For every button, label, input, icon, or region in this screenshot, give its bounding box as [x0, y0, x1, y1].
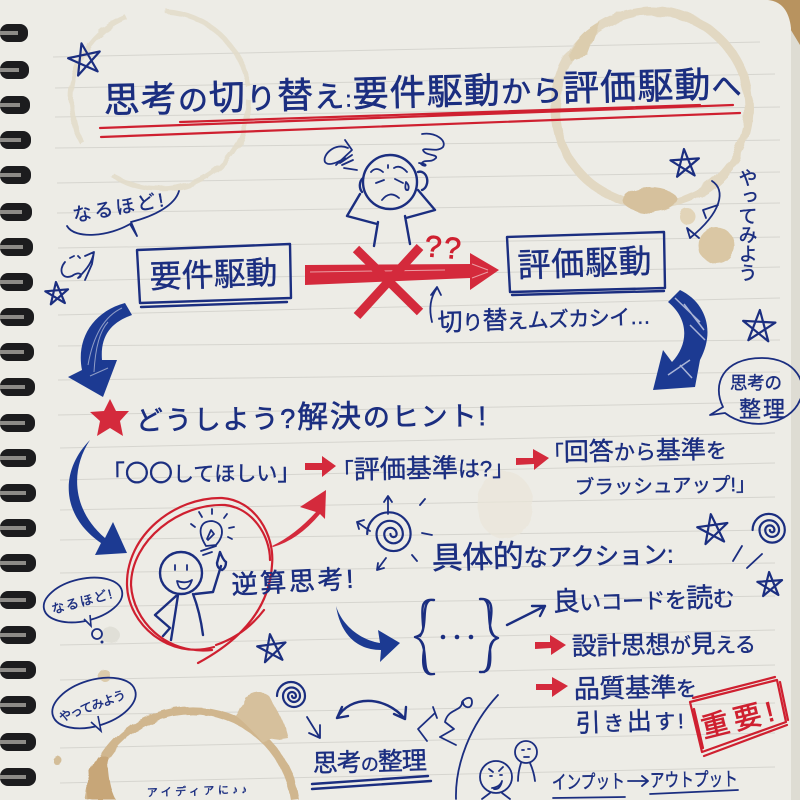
- text: 逆算思考: 逆算思考!: [231, 564, 354, 600]
- icon: two people: [480, 741, 537, 799]
- icon: star center: [256, 632, 288, 663]
- callout: なるほど lower: [39, 571, 127, 644]
- heading: 思考の整理: 思考の整理: [312, 747, 427, 778]
- spiral binding: [0, 24, 36, 786]
- arrow: red diagonal: [272, 490, 326, 547]
- text: 品質基準を引き出す: 引き出す!: [575, 706, 684, 738]
- arrow: small down: [307, 717, 320, 738]
- icon: star left: [45, 281, 69, 305]
- icon: star action right: [696, 512, 730, 545]
- arrow: small curve: [687, 181, 720, 238]
- callout: なるほど lower: なるほど!: [50, 586, 114, 617]
- callout: なるほど top: [67, 189, 179, 236]
- callout: 思考の整理: 整理: [739, 397, 785, 422]
- text: インプット→アウトプット: インプット: [552, 771, 625, 794]
- icon: star right: [742, 309, 776, 342]
- box: 要件駆動: 要件駆動: [149, 255, 278, 295]
- arrow: blue curved right: [653, 290, 707, 390]
- text: 設計思想が見える: 設計思想が見える: [572, 630, 756, 661]
- text: 回答から基準を: [543, 436, 756, 499]
- box: 評価駆動: [507, 232, 665, 295]
- stamp: 重要: [690, 677, 788, 756]
- box: 要件駆動: [137, 244, 291, 307]
- icon: swirl bottom: [277, 682, 305, 707]
- callout: やってみよう: やってみよう: [57, 688, 128, 725]
- braces: [415, 599, 498, 674]
- text: 回答から基準を: 「回答から基準を: [543, 436, 727, 467]
- label: 切り替えムズカシイ: 切り替えムズカシイ…: [437, 302, 651, 337]
- text: 評価基準は: 「評価基準は?」: [332, 452, 514, 485]
- text: 回答から基準を: ブラッシュアップ!」: [575, 473, 756, 499]
- icon: swirl top right: [733, 514, 785, 568]
- doodle: squiggle: [61, 252, 94, 280]
- red circle: [127, 498, 272, 663]
- callout: やってみよう: [46, 668, 142, 738]
- text: ??: ??: [423, 230, 462, 266]
- page stack edge: [786, 22, 800, 800]
- label: 切り替えムズカシイ: [430, 287, 651, 337]
- doodle: squiggle bottom: [418, 698, 472, 745]
- callout: 思考の整理: [710, 358, 800, 424]
- icon: worried person: [325, 134, 444, 246]
- text: やってみよう vertical: やってみよう: [736, 168, 756, 282]
- icon: swirl with rays: [357, 496, 432, 570]
- text: ○○してほしい: 「〇〇してほしい」: [101, 459, 301, 488]
- arrow: red 1: [305, 456, 336, 477]
- arrow: blue to braces: [336, 606, 400, 662]
- icon: red star: [90, 399, 129, 436]
- title: 思考の切り替え:要件駆動から評価駆動へ: [103, 63, 742, 121]
- arrow: blue curved left: [68, 303, 132, 397]
- heading: 具体的なアクション: 具体的なアクション:: [431, 535, 674, 576]
- icon: star lower right: [757, 571, 783, 596]
- arrow: blue curved lower: [69, 440, 127, 555]
- text: インプット→アウトプット: アウトプット: [650, 768, 738, 792]
- arrow: red 2: [516, 449, 549, 470]
- text: インプット→アウトプット: [552, 768, 738, 798]
- arrow: double curved: [337, 701, 406, 719]
- curve divider: [456, 695, 498, 799]
- stamp: 重要: 重要!: [698, 696, 777, 744]
- arrow: blue thin: [507, 606, 545, 625]
- text: 品質基準を引き出す: 品質基準を: [574, 672, 697, 704]
- text: アイディア cut off: アイディアに♪♪: [147, 782, 247, 799]
- arrow: red crossed out: [305, 247, 499, 316]
- arrow: red 3: [535, 635, 566, 655]
- text: 品質基準を引き出す: [574, 672, 697, 738]
- icon: smiling person: [155, 552, 226, 640]
- callout: 思考の整理: 思考の: [730, 373, 782, 393]
- callout: なるほど top: なるほど!: [71, 189, 165, 227]
- icon: lightbulb: [191, 509, 234, 555]
- arrow: red 4: [536, 677, 568, 697]
- icon: star top left: [66, 40, 104, 77]
- icon: star upper right: [670, 148, 700, 177]
- heading: どうしよう: どうしよう?解決のヒント!: [136, 397, 486, 437]
- text: 良いコードを読む: 良いコードを読む: [552, 582, 735, 617]
- box: 評価駆動: 評価駆動: [517, 242, 652, 284]
